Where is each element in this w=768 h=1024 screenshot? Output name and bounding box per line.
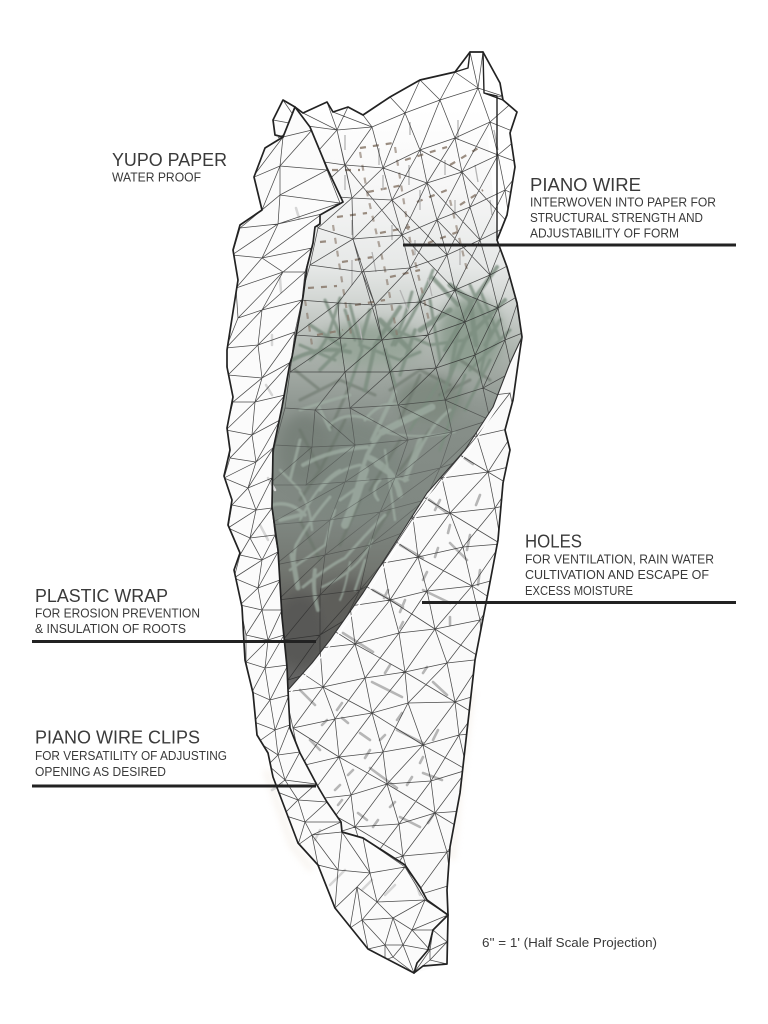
label: plastic wrap: FOR EROSION PREVENTION: [35, 606, 200, 620]
plant: pale lower leaves: [258, 392, 455, 610]
panel: translucent back paper: [250, 52, 522, 690]
label: piano wire clips: PIANO WIRE CLIPS: [35, 726, 200, 748]
mesh: back paper triangulation: [268, 52, 530, 680]
panel: front paper: [288, 392, 512, 894]
label: plastic wrap: [32, 585, 316, 643]
label: holes: HOLES: [525, 530, 582, 552]
label: plastic wrap: PLASTIC WRAP: [35, 585, 168, 606]
plant: darker upper blades: [292, 267, 510, 450]
label: yupo paper: [112, 150, 227, 184]
label: piano wire clips: FOR VERSATILITY OF ADJUSTING: [35, 749, 227, 763]
label: piano wire: STRUCTURAL STRENGTH AND: [530, 211, 703, 225]
label: holes: [422, 530, 736, 604]
label: yupo paper: WATER PROOF: [112, 170, 201, 184]
plant: dark texture blades: [295, 360, 490, 560]
illustration: paper planter: [224, 52, 533, 973]
holes: grey hole marks on front paper: [300, 457, 480, 827]
label: piano wire clips: OPENING AS DESIRED: [35, 765, 166, 779]
label: piano wire clips: [32, 726, 316, 788]
mesh: left wrap triangulation: [224, 130, 448, 973]
soft shadow under the paper: [266, 690, 472, 870]
label: piano wire: [403, 174, 736, 246]
label: holes: FOR VENTILATION, RAIN WATER: [525, 552, 714, 566]
plant: lavender seen through the opening: [273, 264, 512, 616]
label: piano wire: ADJUSTABILITY OF FORM: [530, 226, 679, 240]
piano wire: dashed wire lines in back paper: [305, 143, 483, 345]
label: plastic wrap: & INSULATION OF ROOTS: [35, 622, 186, 636]
scale note: 6'' = 1' (Half Scale Projection): [482, 936, 657, 950]
holes: faint marks on left wrap: [260, 208, 420, 895]
label: yupo paper: YUPO PAPER: [112, 150, 227, 170]
label: holes: EXCESS MOISTURE: [525, 584, 633, 598]
holes: small pins in back paper: [345, 120, 498, 340]
label: piano wire: PIANO WIRE: [530, 174, 641, 195]
panel: upper right paper fold: [484, 93, 517, 240]
outline: silhouette and fold edges: [224, 52, 522, 973]
label: piano wire: INTERWOVEN INTO PAPER FOR: [530, 196, 716, 210]
panel: left paper wrap: [224, 107, 448, 973]
mesh: front paper triangulation: [288, 392, 512, 894]
label: holes: CULTIVATION AND ESCAPE OF: [525, 568, 709, 582]
